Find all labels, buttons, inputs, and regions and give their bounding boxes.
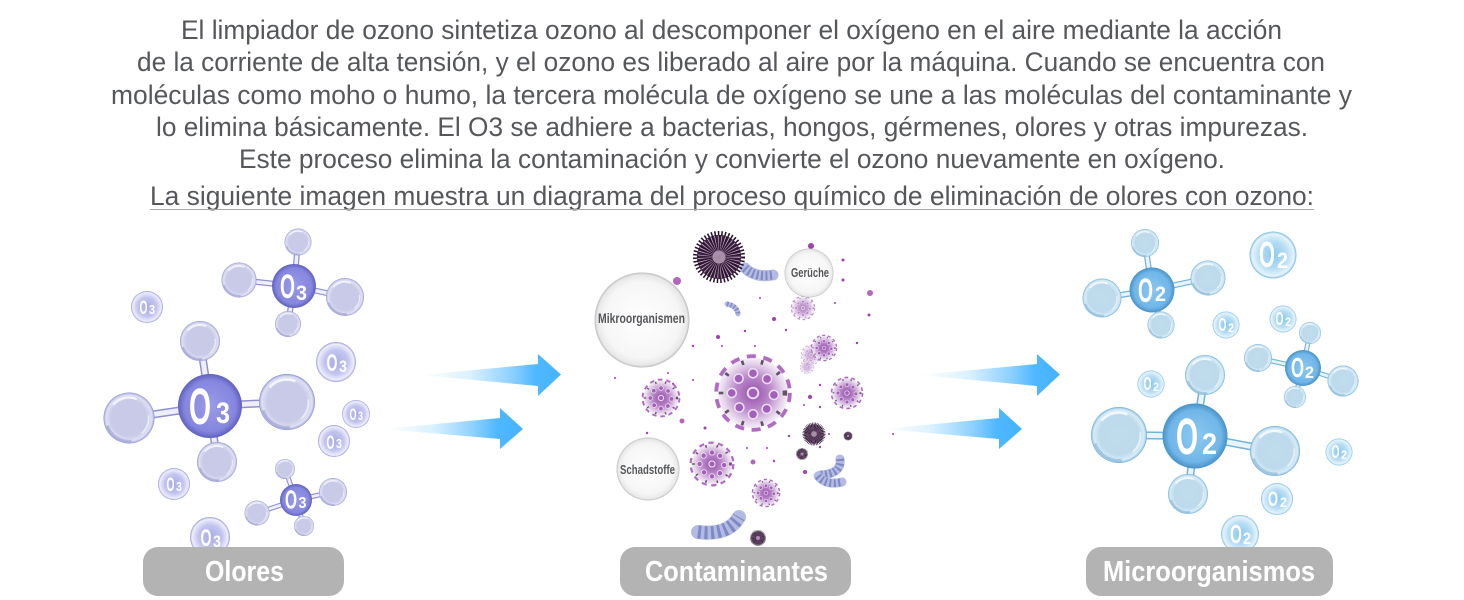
molecule: large O2: [1091, 355, 1300, 514]
bubble: Schadstoffe: Schadstoffe: [620, 462, 675, 477]
molecule: small O2: 2: [1305, 363, 1314, 382]
O2 bubbles: O: [1259, 234, 1275, 275]
O3 bubbles: 3: [339, 357, 347, 376]
intro paragraph: de la corriente de alta tensión, y el ozono es liberado al aire por la máquina. Cuando se encuentra con: [137, 47, 1325, 77]
bubble: Gerüche: Gerüche: [791, 265, 829, 280]
panel: ozone molecules: [104, 228, 370, 557]
intro paragraph: [111, 15, 1353, 174]
molecule: small O3: O: [285, 484, 297, 514]
molecule: small O3: [244, 459, 347, 536]
label: Contaminantes: [620, 547, 851, 596]
O3 bubbles: 3: [213, 532, 221, 551]
bubble: Gerüche: [784, 248, 834, 298]
O2 bubbles: O: [1276, 309, 1284, 329]
O2 bubbles: 2: [1153, 380, 1159, 394]
O3 bubbles: [131, 291, 370, 557]
O3 bubbles: 3: [149, 302, 155, 317]
molecule: small O2: [1244, 322, 1358, 408]
worms: [698, 268, 842, 533]
molecule: top O3: O: [280, 268, 295, 306]
label: Contaminantes: Contaminantes: [645, 556, 828, 588]
O2 bubbles: O: [1230, 519, 1242, 549]
O3 bubbles: 3: [336, 436, 342, 451]
O2 bubbles: [1138, 232, 1352, 553]
label: Microorganismos: [1086, 547, 1333, 596]
dark viruses: [697, 235, 852, 545]
intro paragraph: lo elimina básicamente. El O3 se adhiere a bacterias, hongos, gérmenes, olores y otras impurezas.: [156, 112, 1308, 142]
molecule: top O2: 2: [1155, 283, 1166, 306]
O3 bubbles: O: [200, 525, 212, 552]
O2 bubbles: O: [1218, 315, 1226, 335]
intro paragraph: El limpiador de ozono sintetiza ozono al descomponer el oxígeno en el aire mediante la acción: [181, 15, 1282, 45]
molecule: top O2: O: [1138, 272, 1153, 310]
bubble: Mikroorganismen: Mikroorganismen: [598, 310, 685, 326]
molecule: small O3: 3: [298, 495, 307, 512]
O2 bubbles: O: [1332, 442, 1340, 462]
molecule: large O3: 3: [216, 397, 230, 430]
O3 bubbles: O: [326, 350, 338, 377]
bubble: Schadstoffe: [616, 438, 680, 500]
panel: oxygen molecules: [1082, 229, 1358, 553]
molecule: large O2: 2: [1202, 428, 1217, 461]
O3 bubbles: O: [350, 405, 356, 424]
O2 bubbles: 2: [1228, 321, 1234, 335]
molecule: large O3: O: [189, 378, 211, 435]
molecule: top O2: [1082, 229, 1226, 338]
O3 bubbles: O: [326, 433, 334, 454]
label: Olores: Olores: [205, 556, 284, 588]
molecule: large O2: O: [1176, 408, 1198, 465]
O3 bubbles: 3: [358, 409, 363, 423]
O3 bubbles: 3: [176, 479, 182, 494]
diagram heading: La siguiente imagen muestra un diagrama del proceso químico de eliminación de olores con ozono:: [150, 181, 1314, 211]
O2 bubbles: 2: [1341, 448, 1347, 462]
molecule: large O3: [104, 321, 315, 482]
label: Microorganismos: Microorganismos: [1103, 556, 1315, 588]
intro paragraph: Este proceso elimina la contaminación y convierte el ozono nuevamente en oxígeno.: [239, 144, 1225, 174]
molecule: small O2: O: [1291, 352, 1304, 383]
bubble: Mikroorganismen: [594, 272, 690, 368]
label: Olores: [143, 547, 344, 596]
arrows: contaminants to oxygen: [882, 354, 1060, 449]
viruses: [643, 296, 863, 507]
particles: [614, 243, 894, 474]
molecule: top O3: 3: [296, 282, 307, 305]
O2 bubbles: 2: [1243, 529, 1251, 548]
molecule: top O3: [222, 228, 364, 337]
panel: contaminants: [594, 235, 894, 545]
arrows: ozone to contaminants: [383, 354, 561, 449]
O2 bubbles: 2: [1277, 248, 1288, 273]
O2 bubbles: 2: [1280, 494, 1287, 510]
O2 bubbles: O: [1268, 488, 1278, 511]
O3 bubbles: O: [166, 475, 174, 496]
intro paragraph: moléculas como moho o humo, la tercera molécula de oxígeno se une a las moléculas del contaminante y: [111, 80, 1353, 110]
O3 bubbles: O: [140, 298, 148, 319]
O2 bubbles: 2: [1285, 315, 1291, 329]
O2 bubbles: O: [1144, 374, 1152, 394]
